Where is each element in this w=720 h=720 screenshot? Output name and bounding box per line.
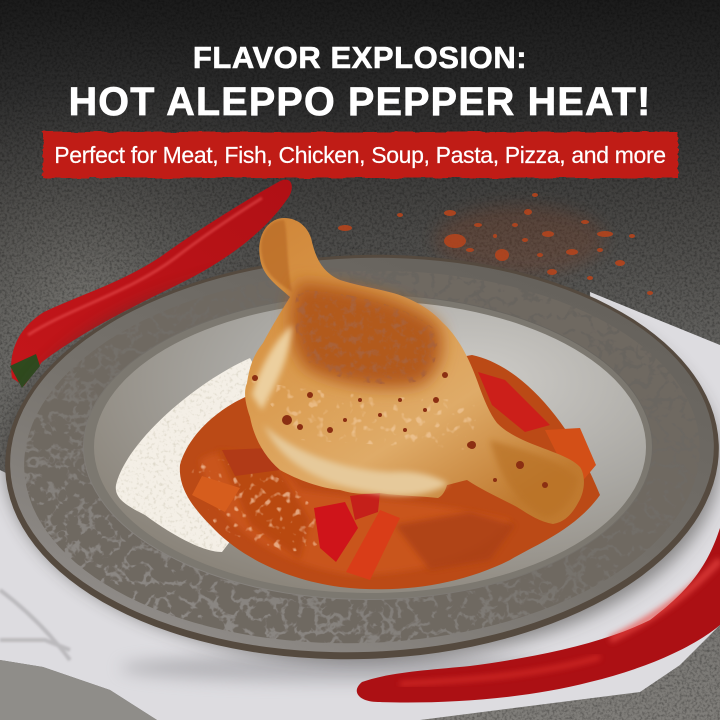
white lace cloth bbox=[0, 292, 720, 720]
tomato sauce bbox=[180, 355, 600, 589]
chili pepper: bottom right bbox=[357, 528, 720, 702]
title line two: HOT ALEPPO PEPPER HEAT! bbox=[69, 80, 651, 124]
scattered spice flakes bbox=[338, 193, 653, 295]
plate ornamental rim bbox=[24, 294, 644, 644]
plate bbox=[0, 254, 720, 671]
roasted chicken leg bbox=[245, 218, 584, 524]
title line one: FLAVOR EXPLOSION: bbox=[193, 40, 527, 75]
rice bbox=[116, 358, 300, 552]
banner text: Perfect for Meat, Fish, Chicken, Soup, Pasta, Pizza, and more bbox=[54, 142, 666, 168]
plate inner well bbox=[94, 301, 646, 593]
red pepper pieces bbox=[314, 502, 358, 562]
chili pepper: top left bbox=[10, 180, 292, 388]
red brush banner bbox=[43, 132, 678, 178]
